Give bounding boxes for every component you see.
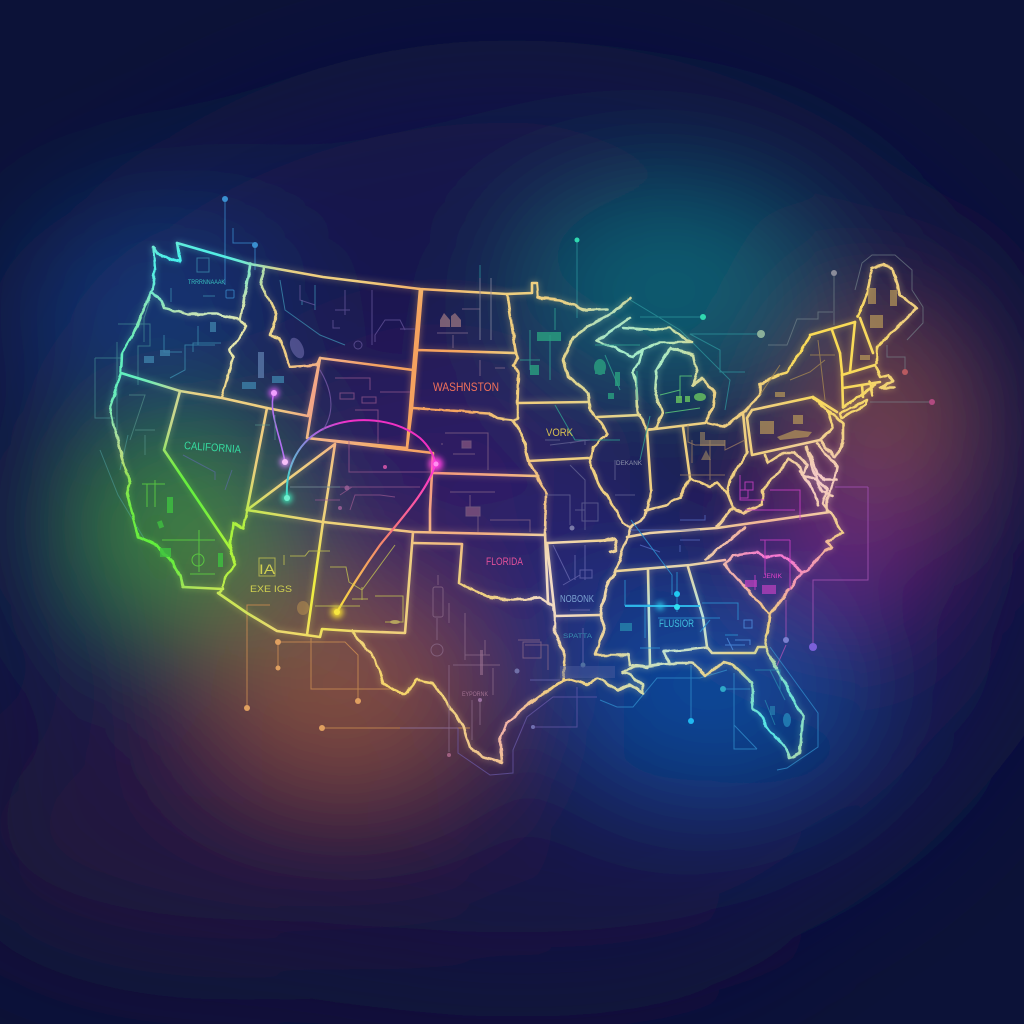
- state labels: [184, 280, 782, 698]
- detail: south california: [142, 480, 215, 574]
- detail: montana: [300, 285, 415, 349]
- detail: virginia and carolinas: [740, 475, 800, 590]
- detail: dakotas and nebraska: [437, 278, 505, 376]
- label: California: CALIFORNIA: [184, 440, 242, 456]
- label: Louisiana caption: SPATTA: [563, 634, 592, 640]
- circuit traces and nodes around the map: [95, 196, 935, 775]
- detail: arizona and new mexico: [259, 545, 403, 622]
- detail: arkansas and louisiana: [530, 545, 592, 680]
- detail: wyoming: [290, 378, 430, 510]
- detail: ohio valley: [680, 425, 745, 480]
- detail: northeast: [760, 340, 835, 400]
- detail: tennessee and kentucky: [630, 515, 705, 552]
- detail: great lakes states: [520, 308, 650, 460]
- label: Arizona caption: EXE IGS: [250, 584, 292, 594]
- detail: mississippi alabama georgia: [624, 520, 738, 648]
- detail: northwest: [164, 258, 345, 378]
- arc: purple link: [272, 393, 285, 462]
- detail: nevada and utah: [129, 395, 340, 487]
- label: Washington state caption: TRRRNNAAAK: [188, 280, 225, 286]
- detail: florida: [755, 670, 785, 725]
- arc nodes: [269, 388, 443, 618]
- label: Washington: WASHNSTON: [433, 380, 499, 394]
- label: York: VORK: [546, 427, 574, 439]
- label: Norfolk: NOBONK: [560, 594, 594, 605]
- arc: wyoming trace: [320, 370, 331, 430]
- label: Illinois caption: DEKANK: [616, 461, 642, 467]
- state boundary glow: [106, 238, 920, 767]
- label: South Carolina caption: JENIK: [763, 574, 782, 580]
- label: Arizona code: IA: [259, 561, 276, 577]
- arc: teal to magenta: [287, 420, 436, 498]
- state interior circuit details: [129, 258, 897, 752]
- label: Florida: FLORIDA: [486, 556, 524, 568]
- state boundary lines: [108, 242, 918, 764]
- detail: texas and oklahoma: [431, 575, 548, 752]
- flight arcs: [272, 370, 436, 612]
- detail: iowa illinois missouri: [545, 440, 635, 530]
- arc: magenta to yellow: [337, 465, 435, 612]
- label: Texas caption: EYPORNK: [462, 692, 488, 698]
- label: Flusior: FLUSIOR: [659, 618, 694, 630]
